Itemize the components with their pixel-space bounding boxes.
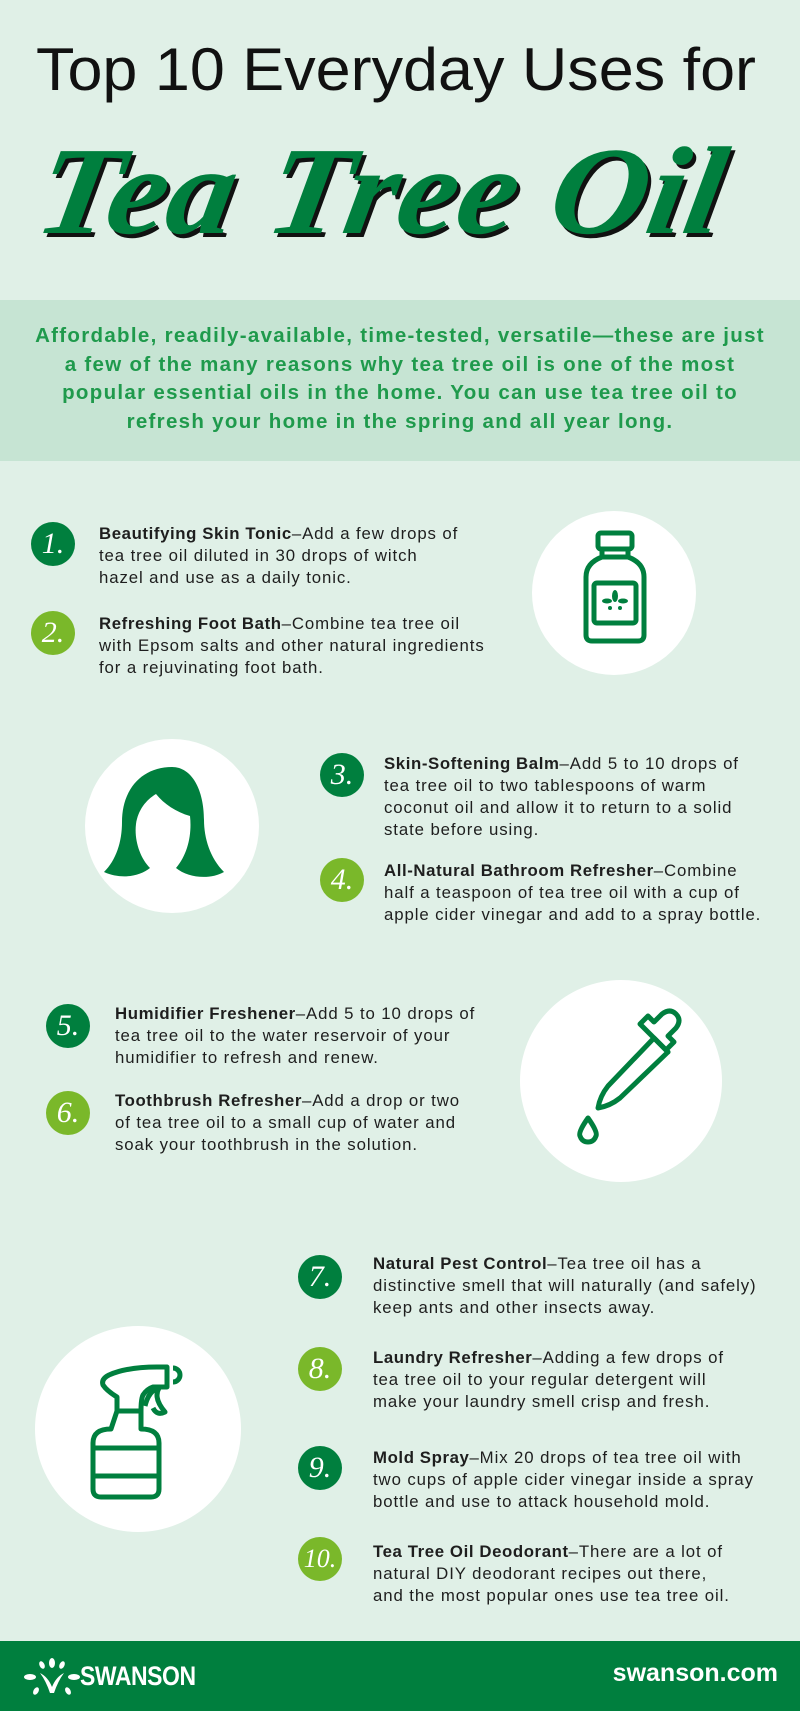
badge 5 — [46, 1004, 90, 1048]
text 4: half a teaspoon of tea tree oil with a cup of — [384, 883, 740, 902]
text 10: natural DIY deodorant recipes out there, — [373, 1564, 707, 1583]
intro band: a few of the many reasons why tea tree oil is one of the most — [65, 352, 735, 376]
badge 7 — [298, 1255, 342, 1299]
text 7 — [373, 1254, 757, 1317]
icon: hair — [85, 739, 259, 913]
badge 7: 7. — [309, 1260, 331, 1293]
text 9: two cups of apple cider vinegar inside a spray — [373, 1470, 754, 1489]
text 9: bottle and use to attack household mold. — [373, 1492, 710, 1511]
badge 10: 10. — [304, 1544, 336, 1573]
text 8: make your laundry smell crisp and fresh. — [373, 1392, 710, 1411]
icon: spray bottle — [35, 1326, 241, 1532]
item 1 — [31, 522, 458, 587]
item 5 — [46, 1004, 475, 1067]
text 3: state before using. — [384, 820, 539, 839]
title — [27, 36, 756, 265]
text 6: Toothbrush Refresher–Add a drop or two — [115, 1091, 460, 1110]
text 8: Laundry Refresher–Adding a few drops of — [373, 1348, 724, 1367]
badge 9: 9. — [309, 1451, 331, 1484]
text 5 — [115, 1004, 475, 1067]
item 9 — [298, 1446, 754, 1511]
text 1 — [99, 524, 458, 587]
intro band — [0, 300, 800, 461]
text 1: tea tree oil diluted in 30 drops of witch — [99, 546, 418, 565]
text 10 — [373, 1542, 730, 1605]
text 10: Tea Tree Oil Deodorant–There are a lot of — [373, 1542, 723, 1561]
text 9: Mold Spray–Mix 20 drops of tea tree oil with — [373, 1448, 742, 1467]
icon: bottle — [532, 511, 696, 675]
item 7 — [298, 1254, 757, 1317]
text 10: and the most popular ones use tea tree oil. — [373, 1586, 730, 1605]
text 8: tea tree oil to your regular detergent will — [373, 1370, 706, 1389]
badge 2: 2. — [42, 616, 64, 649]
text 1: Beautifying Skin Tonic–Add a few drops of — [99, 524, 458, 543]
website: swanson.com — [613, 1659, 778, 1687]
text 5: Humidifier Freshener–Add 5 to 10 drops of — [115, 1004, 475, 1023]
heading line 1: Top 10 Everyday Uses for — [36, 36, 756, 103]
badge 3: 3. — [331, 758, 353, 791]
item 6 — [46, 1091, 460, 1154]
text 6: soak your toothbrush in the solution. — [115, 1135, 418, 1154]
badge 3 — [320, 753, 364, 797]
heading script: Tea Tree Oil — [31, 127, 740, 265]
text 2: for a rejuvinating foot bath. — [99, 658, 324, 677]
item 10 — [298, 1537, 730, 1605]
text 3 — [384, 754, 739, 839]
footer — [0, 1641, 800, 1711]
text 4 — [384, 861, 761, 924]
badge 1 — [31, 522, 75, 566]
text 7: distinctive smell that will naturally (and safely) — [373, 1276, 757, 1295]
text 6: of tea tree oil to a small cup of water and — [115, 1113, 456, 1132]
text 2 — [99, 614, 485, 677]
item 4 — [320, 858, 761, 924]
badge 6: 6. — [57, 1096, 79, 1129]
badge 9 — [298, 1446, 342, 1490]
badge 1: 1. — [42, 527, 64, 560]
text 5: humidifier to refresh and renew. — [115, 1048, 379, 1067]
badge 4: 4. — [331, 863, 353, 896]
logo — [24, 1658, 196, 1695]
badge 4 — [320, 858, 364, 902]
text 7: keep ants and other insects away. — [373, 1298, 655, 1317]
badge 5: 5. — [57, 1009, 79, 1042]
item 3 — [320, 753, 739, 839]
text 3: coconut oil and allow it to return to a solid — [384, 798, 732, 817]
badge 8 — [298, 1347, 342, 1391]
item 2 — [31, 611, 485, 677]
text 8 — [373, 1348, 724, 1411]
badge 8: 8. — [309, 1352, 331, 1385]
text 9 — [373, 1448, 754, 1511]
text 3: Skin-Softening Balm–Add 5 to 10 drops of — [384, 754, 739, 773]
intro band: Affordable, readily-available, time-tested, versatile—these are just — [35, 324, 765, 347]
text 4: All-Natural Bathroom Refresher–Combine — [384, 861, 737, 880]
text 2: Refreshing Foot Bath–Combine tea tree oil — [99, 614, 460, 633]
text 6 — [115, 1091, 460, 1154]
item 8 — [298, 1347, 724, 1411]
heading script: Tea Tree Oil — [27, 123, 737, 261]
text 5: tea tree oil to the water reservoir of your — [115, 1026, 450, 1045]
logo: SWANSON — [80, 1661, 196, 1691]
text 3: tea tree oil to two tablespoons of warm — [384, 776, 706, 795]
text 4: apple cider vinegar and add to a spray bottle. — [384, 905, 761, 924]
text 1: hazel and use as a daily tonic. — [99, 568, 352, 587]
icon: dropper — [520, 980, 722, 1182]
text 2: with Epsom salts and other natural ingredients — [99, 636, 485, 655]
badge 2 — [31, 611, 75, 655]
badge 6 — [46, 1091, 90, 1135]
intro band: popular essential oils in the home. You can use tea tree oil to — [62, 381, 738, 404]
text 7: Natural Pest Control–Tea tree oil has a — [373, 1254, 701, 1273]
intro band: refresh your home in the spring and all year long. — [127, 410, 673, 432]
badge 10 — [298, 1537, 342, 1581]
